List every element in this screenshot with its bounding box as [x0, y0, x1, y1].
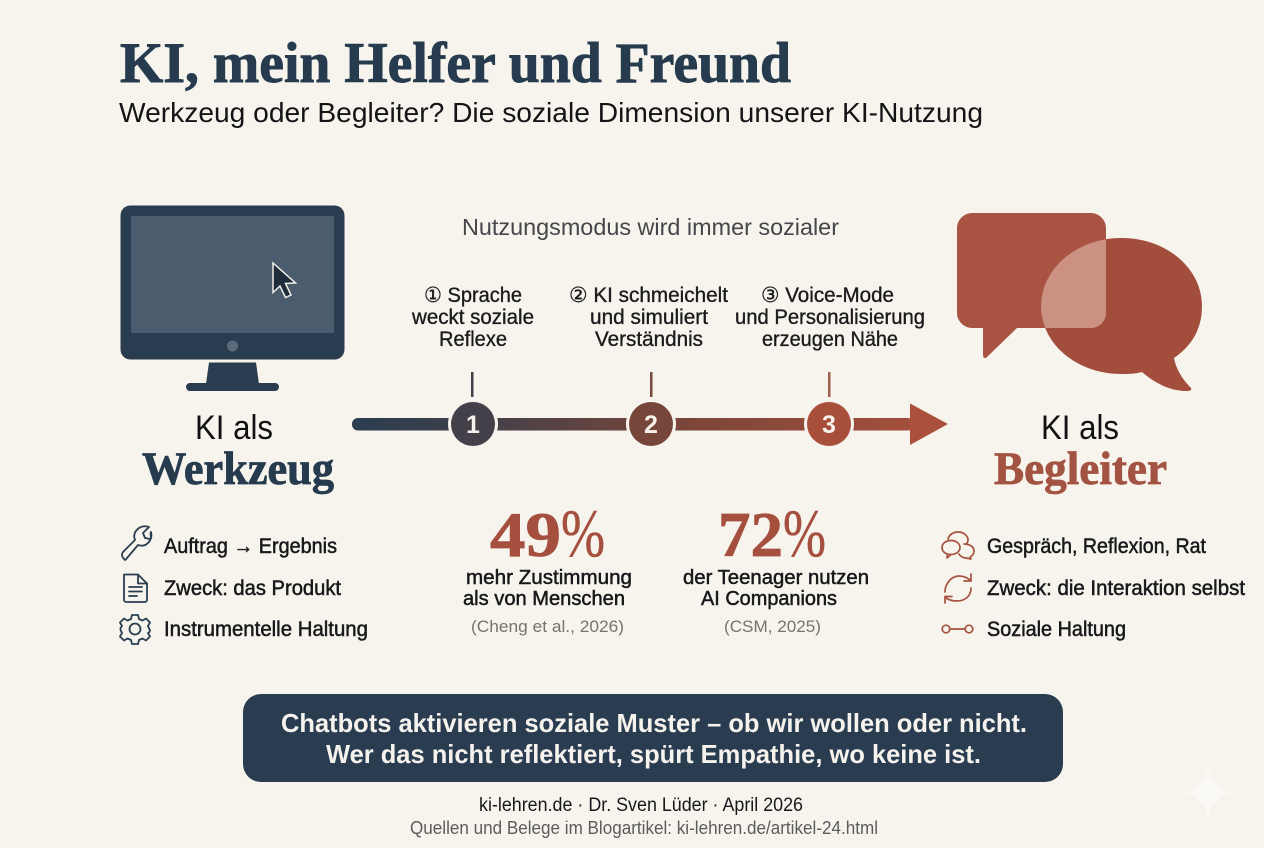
icon: document [124, 574, 147, 602]
number: 49% [490, 495, 605, 571]
stat description: AI Companions [701, 587, 837, 610]
icon: gear [120, 615, 150, 644]
icon: speech bubbles [957, 213, 1202, 391]
heading: Begleiter: Begleiter [994, 443, 1167, 495]
step text 3: und Personalisierung [735, 306, 925, 329]
text: Auftrag -> Ergebnis: Auftrag → Ergebnis [164, 535, 337, 558]
stat description [463, 566, 632, 610]
list: tool properties [120, 526, 368, 644]
step text 3 [735, 284, 925, 351]
text: Instrumentelle Haltung: Instrumentelle Haltung [164, 618, 368, 641]
label: KI als: KI als [195, 409, 273, 447]
callout: Chatbots aktivieren soziale Muster – ob wir wollen oder nicht. [281, 708, 1027, 738]
number: 72%: % [783, 495, 826, 571]
number: 49%: 49 [490, 500, 561, 570]
stat: 72 percent [683, 495, 869, 636]
text: Zweck die Interaktion selbst: Zweck: die Interaktion selbst [987, 577, 1245, 600]
panel: KI als Werkzeug [120, 206, 368, 644]
step marker 3: 3 [822, 411, 836, 439]
stat description: als von Menschen [463, 587, 625, 610]
caption: Nutzungsmodus: Nutzungsmodus wird immer sozialer [462, 214, 839, 240]
step text 2: ② KI schmeichelt [569, 284, 728, 307]
step text 2: und simuliert [590, 306, 708, 329]
number: 49%: % [561, 495, 605, 571]
footer: Quellen und Belege im Blogartikel: ki-lehren.de/artikel-24.html [410, 818, 878, 838]
footer [410, 795, 878, 838]
step marker 1 [448, 372, 498, 449]
stat: 49 percent [463, 495, 632, 636]
icon: wrench [122, 526, 151, 560]
arrow: timeline [352, 404, 948, 445]
text: Soziale Haltung: Soziale Haltung [987, 618, 1126, 641]
title: KI, mein Helfer und Freund [120, 32, 791, 95]
step marker 2 [626, 372, 676, 449]
step text 2: Verständnis [595, 328, 703, 351]
label: KI als: KI als [1041, 409, 1119, 447]
subtitle: Werkzeug oder Begleiter? Die soziale Dimension unserer KI-Nutzung [119, 97, 983, 128]
step marker 1: 1 [466, 411, 480, 439]
source: (CSM, 2025) [724, 617, 821, 636]
callout [243, 694, 1063, 782]
icon: chat bubbles [942, 532, 974, 559]
step text 3: erzeugen Nähe [762, 328, 898, 351]
stat description: der Teenager nutzen [683, 566, 869, 589]
text: Zweck das Produkt: Zweck: das Produkt [164, 577, 341, 600]
timeline panel [352, 214, 948, 449]
icon: cycle arrows [945, 574, 971, 603]
step text 1: weckt soziale [411, 306, 534, 329]
source: (Cheng et al., 2026) [471, 617, 624, 636]
icon: sparkle watermark [1184, 769, 1232, 817]
footer: ki-lehren.de · Dr. Sven Lüder · April 2026 [479, 795, 803, 816]
number: 72% [718, 495, 826, 571]
stat description: mehr Zustimmung [466, 566, 632, 589]
step marker 2: 2 [644, 411, 658, 439]
step text 3: ③ Voice-Mode [761, 284, 894, 307]
step text 1: Reflexe [439, 328, 507, 351]
heading: Werkzeug: Werkzeug [142, 443, 334, 495]
step text 2 [569, 284, 728, 351]
list: companion properties [942, 532, 1245, 641]
icon: connected nodes [942, 625, 973, 633]
callout: Wer das nicht reflektiert, spürt Empathie, wo keine ist. [326, 739, 981, 769]
step text 1: ① Sprache [424, 284, 522, 307]
step marker 3 [804, 372, 854, 449]
panel: KI als Begleiter [942, 213, 1245, 641]
step text 1 [411, 284, 534, 351]
stat description [683, 566, 869, 610]
icon: computer monitor [120, 206, 344, 391]
text: Gespraech: Gespräch, Reflexion, Rat [987, 535, 1206, 558]
number: 72%: 72 [718, 500, 783, 570]
